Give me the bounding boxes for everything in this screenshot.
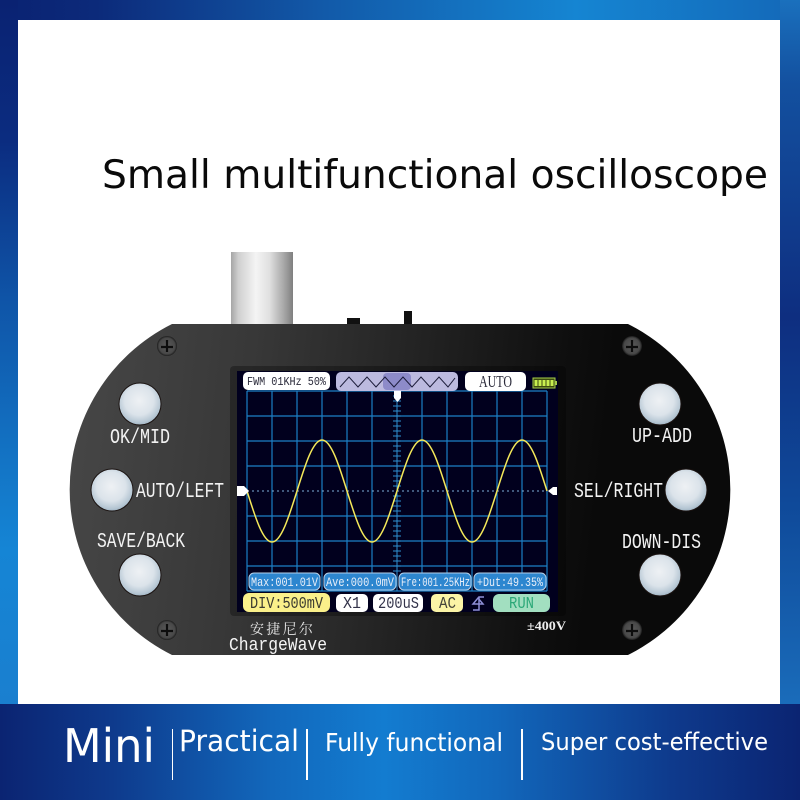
trigger markers <box>237 391 557 496</box>
banner text: Super cost-effective: Super cost-effective <box>541 728 768 756</box>
button labels: OK/MID <box>110 427 170 450</box>
voltage rating: ±400V <box>527 618 567 633</box>
brand name ChargeWave: ChargeWave <box>229 636 327 656</box>
bottom status bar: AC <box>439 595 456 614</box>
icon: battery <box>533 378 557 388</box>
button labels: DOWN-DIS <box>622 532 701 555</box>
measurement readouts <box>249 573 546 590</box>
center axes <box>247 391 547 591</box>
icon: power switch <box>347 311 412 325</box>
screws <box>157 336 642 640</box>
banner text: Mini: Mini <box>63 719 155 773</box>
button labels <box>97 426 701 555</box>
measurement readouts: +Dut:49.35% <box>477 575 543 590</box>
waveform <box>247 440 547 542</box>
top status bar: AUTO <box>479 372 512 391</box>
screen bezel <box>230 366 566 616</box>
brand name Chinese: 安捷尼尔 <box>250 621 315 638</box>
buttons <box>91 383 707 596</box>
divider 2 <box>306 729 308 780</box>
top status bar: FWM 01KHz 50% <box>247 375 327 389</box>
button labels: SEL/RIGHT <box>574 481 663 504</box>
measurement readouts: Ave:000.0mV <box>326 575 394 590</box>
button labels: UP-ADD <box>632 426 692 449</box>
top status bar <box>243 372 526 391</box>
divider 1 <box>172 729 173 780</box>
grid <box>247 391 547 591</box>
button labels: SAVE/BACK <box>97 531 185 554</box>
bottom status bar: DIV:500mV <box>250 595 324 614</box>
banner text: Fully functional: Fully functional <box>325 728 503 757</box>
measurement readouts: Fre:001.25KHz <box>401 575 470 590</box>
bottom banner <box>0 704 800 800</box>
device body <box>70 324 730 656</box>
bottom status bar: RUN <box>509 595 534 614</box>
measurement readouts: Max:001.01V <box>251 575 318 590</box>
bottom status bar: 200uS <box>378 595 419 614</box>
bottom status bar <box>243 593 550 614</box>
title: Small multifunctional oscilloscope <box>102 153 768 198</box>
button labels: AUTO/LEFT <box>136 481 224 504</box>
icon: BNC connector <box>231 252 293 325</box>
divider 3 <box>521 729 523 780</box>
banner text: Practical: Practical <box>179 724 299 758</box>
oscilloscope screen <box>237 371 558 614</box>
bottom status bar: X1 <box>343 595 361 614</box>
